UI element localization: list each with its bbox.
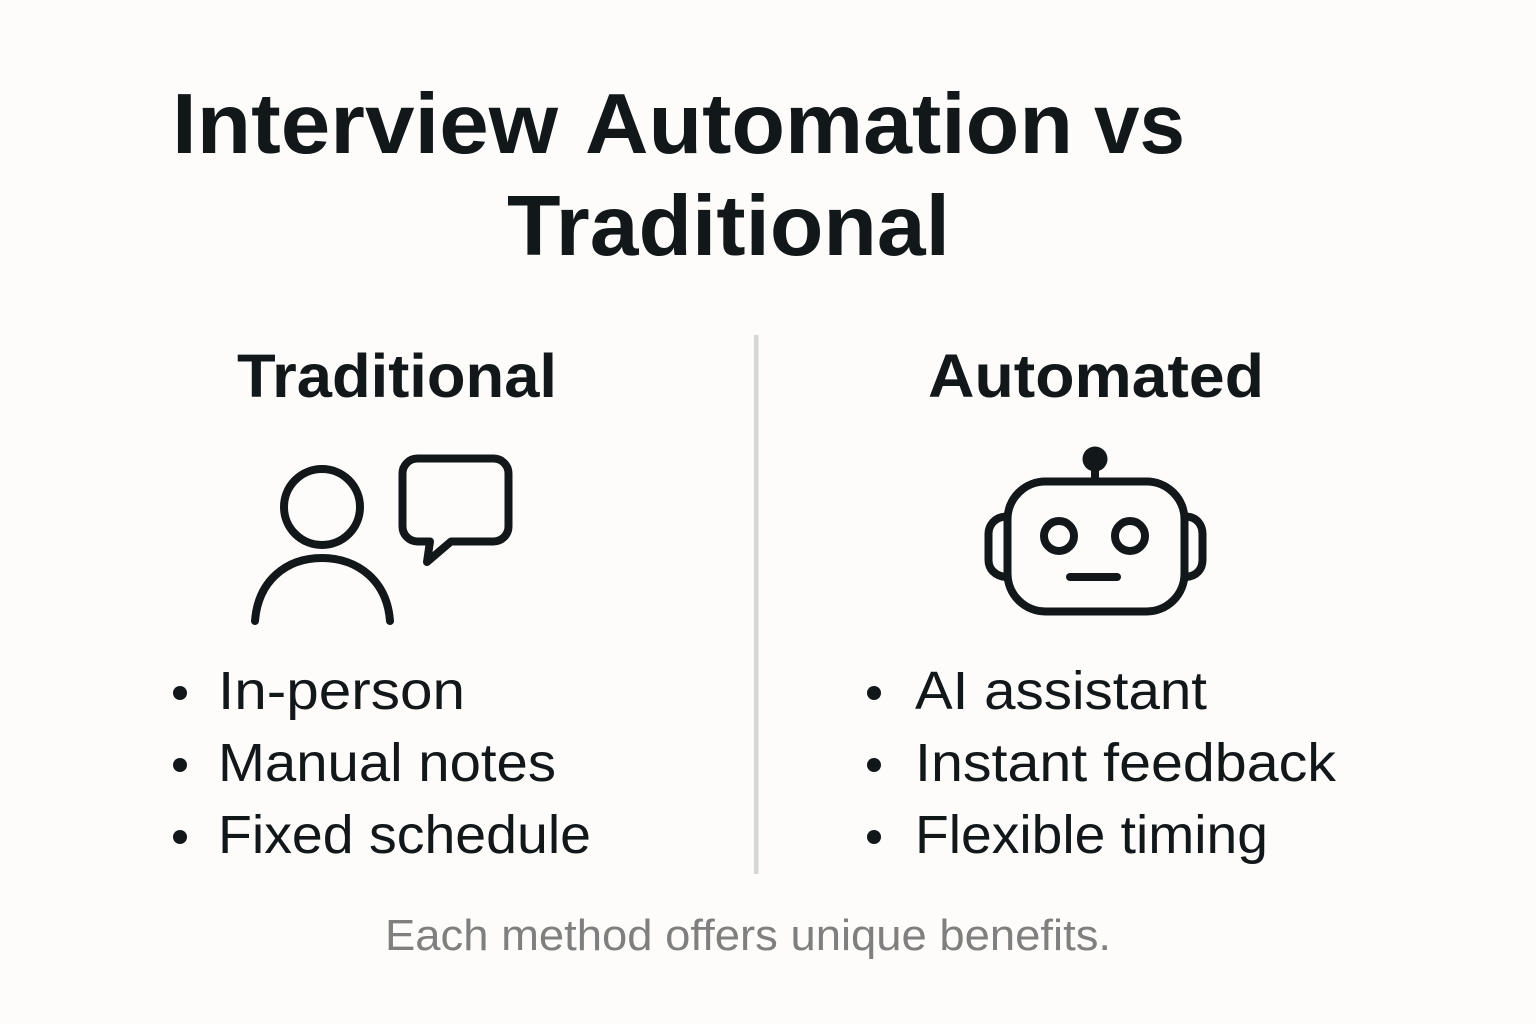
title: Interview	[172, 77, 559, 172]
icon: person with speech bubble	[255, 458, 508, 621]
list: automated features: Instant feedback	[915, 733, 1337, 793]
footer caption: Each method offers unique benefits.	[385, 911, 1111, 960]
title	[172, 77, 1185, 274]
list: automated features: Flexible timing	[915, 805, 1268, 865]
list: traditional features: Fixed schedule	[218, 805, 591, 865]
title: Traditional	[507, 179, 950, 274]
list: traditional features: In-person	[218, 661, 465, 721]
heading: traditional: Traditional	[237, 342, 557, 410]
heading: automated: Automated	[928, 342, 1264, 410]
list: traditional features: Manual notes	[218, 733, 556, 793]
list: automated features	[867, 661, 1337, 865]
panel: traditional	[173, 342, 591, 865]
panel: automated	[867, 342, 1337, 865]
list: traditional features	[173, 661, 591, 865]
list: automated features: AI assistant	[915, 661, 1207, 721]
icon: robot	[988, 446, 1202, 612]
title: vs	[1094, 77, 1185, 172]
title: Automation	[585, 77, 1073, 172]
